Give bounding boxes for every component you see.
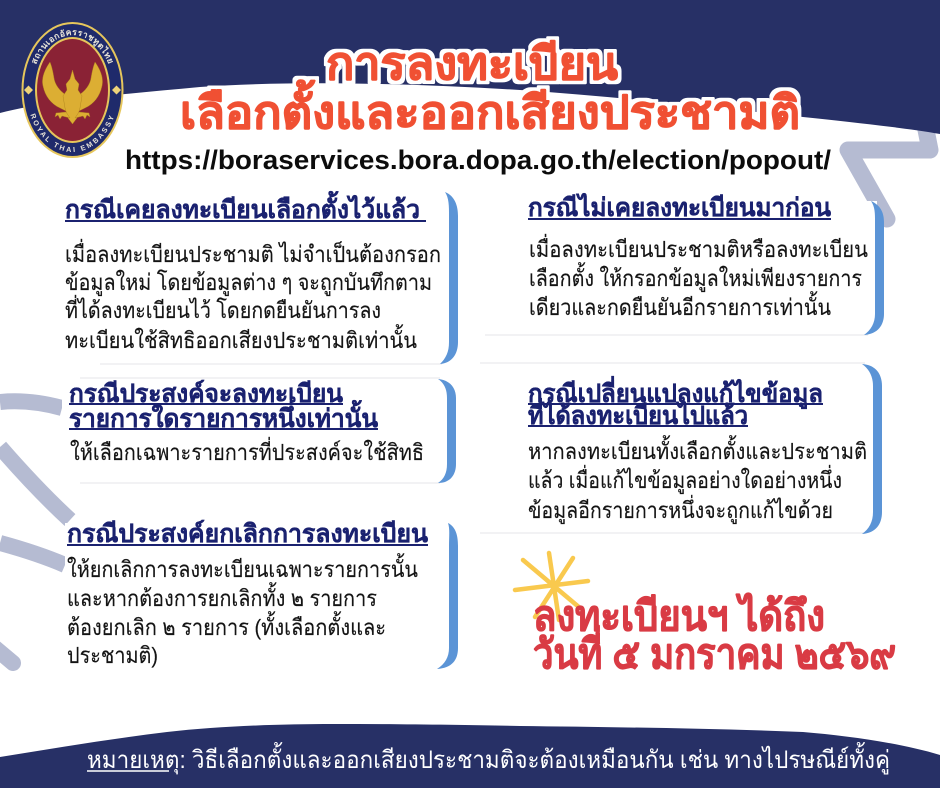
body text: ประชามติ) [67,643,158,668]
body text: ให้ยกเลิกการลงทะเบียนเฉพาะรายการนั้น [67,553,418,582]
panel: never registered [485,192,884,335]
deadline callout: ลงทะเบียนฯ ได้ถึง [533,592,825,639]
embassy emblem [22,22,124,158]
deadline callout [533,592,896,677]
body text: ทะเบียนใช้สิทธิออกเสียงประชามติเท่านั้น [65,324,417,353]
top navy header band [0,0,940,134]
title [180,38,800,138]
body text: เดียวและกดยืนยันอีกรายการเท่านั้น [529,291,831,320]
body text: ที่ได้ลงทะเบียนไว้ โดยกดยืนยันการลง [65,294,381,323]
body text [65,238,441,353]
heading: กรณีเคยลงทะเบียนเลือกตั้งไว้แล้ว [65,190,420,224]
panel: change registered data [480,363,882,534]
emblem: garuda [42,62,103,124]
heading: กรณีเปลี่ยนแปลงแก้ไขข้อมูล [528,376,823,410]
bottom navy footer band [0,724,940,788]
body text: เลือกตั้ง ให้กรอกข้อมูลใหม่เพียงรายการ [529,262,862,292]
body text: ข้อมูลใหม่ โดยข้อมูลต่าง ๆ จะถูกบันทึกตาม [65,269,432,296]
body text: เมื่อลงทะเบียนประชามติหรือลงทะเบียน [529,233,868,262]
heading: กรณีประสงค์ยกเลิกการลงทะเบียน [67,519,428,548]
title: การลงทะเบียน [326,38,618,89]
heading: ที่ได้ลงทะเบียนไปแล้ว [528,398,748,430]
registration url: https://boraservices.bora.dopa.go.th/election/popout/ [125,145,832,175]
body text: ให้เลือกเฉพาะรายการที่ประสงค์จะใช้สิทธิ [70,436,424,465]
body text: แล้ว เมื่อแก้ไขข้อมูลอย่างใดอย่างหนึ่ง [528,464,842,494]
grey decoration: left curves [0,401,70,663]
heading [528,376,823,430]
body text [528,435,867,524]
panel: cancel registration [65,519,458,669]
emblem: English ring text: ROYAL THAI EMBASSY [30,113,114,152]
body text: ข้อมูลอีกรายการหนึ่งจะถูกแก้ไขด้วย [528,494,833,524]
body text: และหากต้องการยกเลิกทั้ง ๒ รายการ [67,582,377,611]
emblem: diamonds [24,86,121,94]
body text: หากลงทะเบียนทั้งเลือกตั้งและประชามติ [528,435,867,464]
heading: กรณีประสงค์จะลงทะเบียน [69,379,343,408]
heading [69,379,378,433]
panel: already registered [60,190,458,364]
footer note: หมายเหตุ: วิธีเลือกตั้งและออกเสียงประชามติจะต้องเหมือนกัน เช่น ทางไปรษณีย์ทั้งคู่ [87,742,890,775]
body text [67,553,418,668]
panel: register one item only [62,378,456,483]
emblem: Thai ring text: สถานเอกอัครราชทูตไทย [32,29,113,64]
body text: ต้องยกเลิก ๒ รายการ (ทั้งเลือกตั้งและ [67,611,386,640]
title: เลือกตั้งและออกเสียงประชามติ [180,79,800,138]
icon: yellow starburst [515,553,588,620]
deadline callout: วันที่ ๕ มกราคม ๒๕๖๙ [533,625,896,677]
grey decoration: top right zigzag [848,125,930,219]
body text [529,233,868,320]
body text: เมื่อลงทะเบียนประชามติ ไม่จำเป็นต้องกรอก [65,238,441,267]
heading: รายการใดรายการหนึ่งเท่านั้น [69,399,378,433]
heading: กรณีไม่เคยลงทะเบียนมาก่อน [528,192,831,222]
